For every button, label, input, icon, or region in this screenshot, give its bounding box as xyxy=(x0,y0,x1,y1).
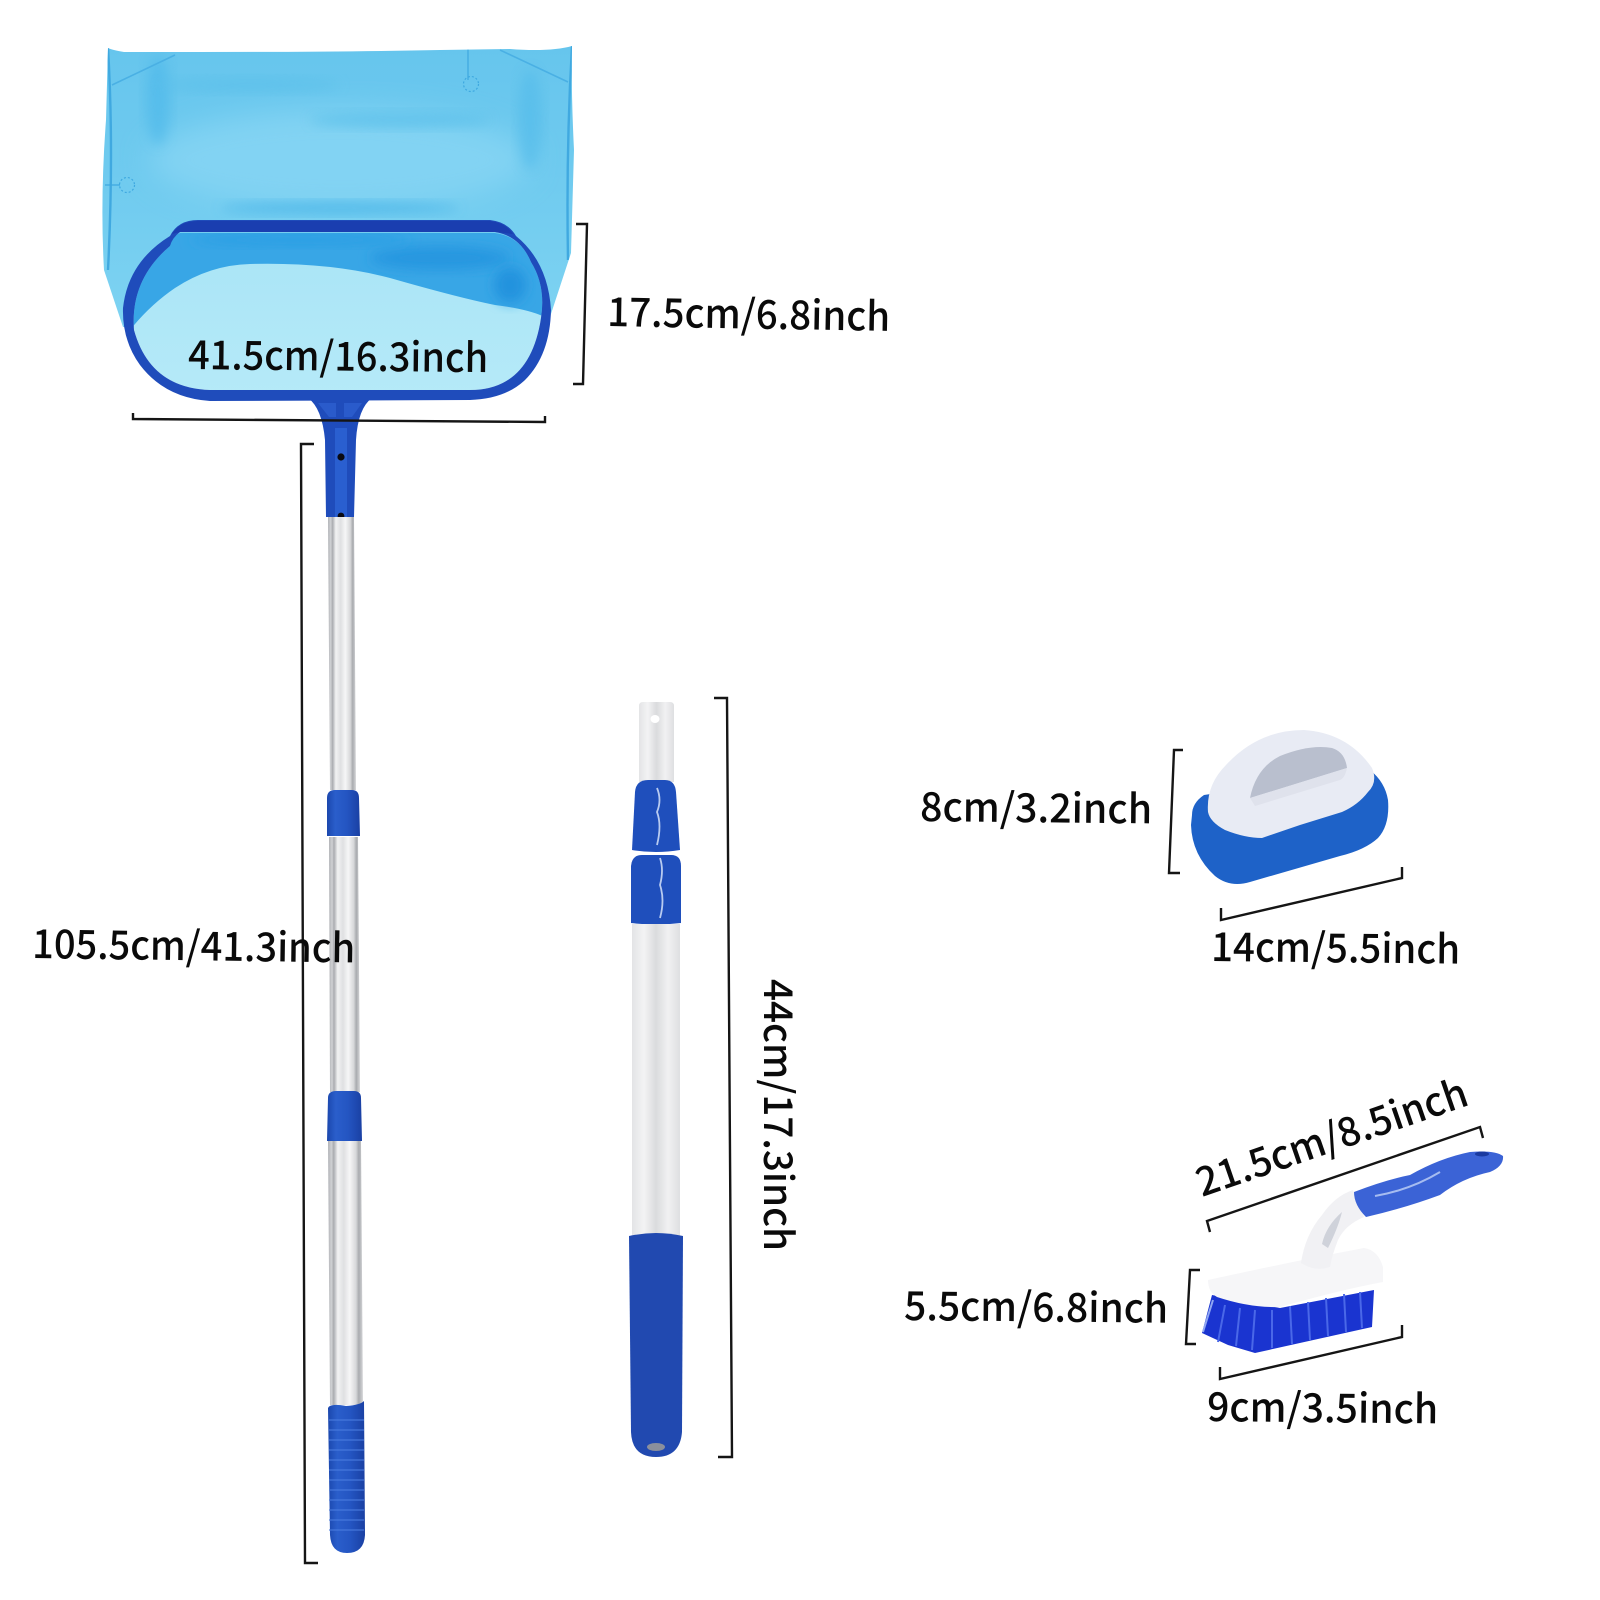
label: brush width: 9cm/3.5inch xyxy=(1207,1375,1438,1435)
extension pole xyxy=(629,702,683,1457)
metal section 3 xyxy=(328,1140,363,1405)
label: net height: 17.5cm/6.8inch xyxy=(607,280,891,343)
metal section 2 xyxy=(329,837,360,1092)
bracket: brush length xyxy=(1207,1127,1483,1232)
collar 2 xyxy=(327,1091,362,1141)
extension collar lower xyxy=(631,855,681,924)
ribbed grip xyxy=(328,1401,365,1553)
extension collar upper xyxy=(632,780,680,852)
net seen through the frame xyxy=(134,233,542,390)
metal section 1 xyxy=(328,517,356,790)
sponge handle xyxy=(1208,730,1374,838)
label: brush length: 21.5cm/8.5inch xyxy=(1187,1061,1474,1208)
bracket: sponge length xyxy=(1221,867,1402,920)
extension grip xyxy=(629,1233,683,1457)
net mesh bag xyxy=(102,46,574,327)
bracket: brush height xyxy=(1186,1270,1200,1344)
brush handle xyxy=(1354,1152,1503,1217)
collar 1 xyxy=(327,790,360,836)
scrub brush xyxy=(1202,1152,1503,1353)
label: extension pole: 44cm/17.3inch xyxy=(752,979,810,1251)
bracket: extension pole xyxy=(714,698,732,1457)
label: sponge length: 14cm/5.5inch xyxy=(1211,915,1460,976)
brush neck xyxy=(1301,1190,1364,1269)
bracket: pole length xyxy=(301,444,318,1563)
brush bristles xyxy=(1202,1290,1374,1353)
frame top edge xyxy=(172,221,513,234)
label: net width: 41.5cm/16.3inch xyxy=(188,323,488,384)
metal tip xyxy=(639,702,674,782)
sponge pad xyxy=(1191,770,1388,884)
scrub sponge xyxy=(1191,730,1388,884)
label: sponge height: 8cm/3.2inch xyxy=(920,775,1152,835)
telescopic pole xyxy=(327,517,365,1553)
bracket: net width xyxy=(133,413,545,422)
handle connector xyxy=(308,398,372,519)
brush head xyxy=(1208,1248,1383,1307)
bracket: sponge height xyxy=(1169,750,1183,873)
label: brush height: 5.5cm/6.8inch xyxy=(904,1274,1168,1335)
bracket: brush width xyxy=(1220,1325,1402,1379)
bracket: net height xyxy=(573,224,587,384)
skimmer net xyxy=(102,46,574,519)
extension metal shaft xyxy=(632,924,680,1236)
skimmer frame xyxy=(123,220,551,401)
label: pole length: 105.5cm/41.3inch xyxy=(32,912,356,975)
